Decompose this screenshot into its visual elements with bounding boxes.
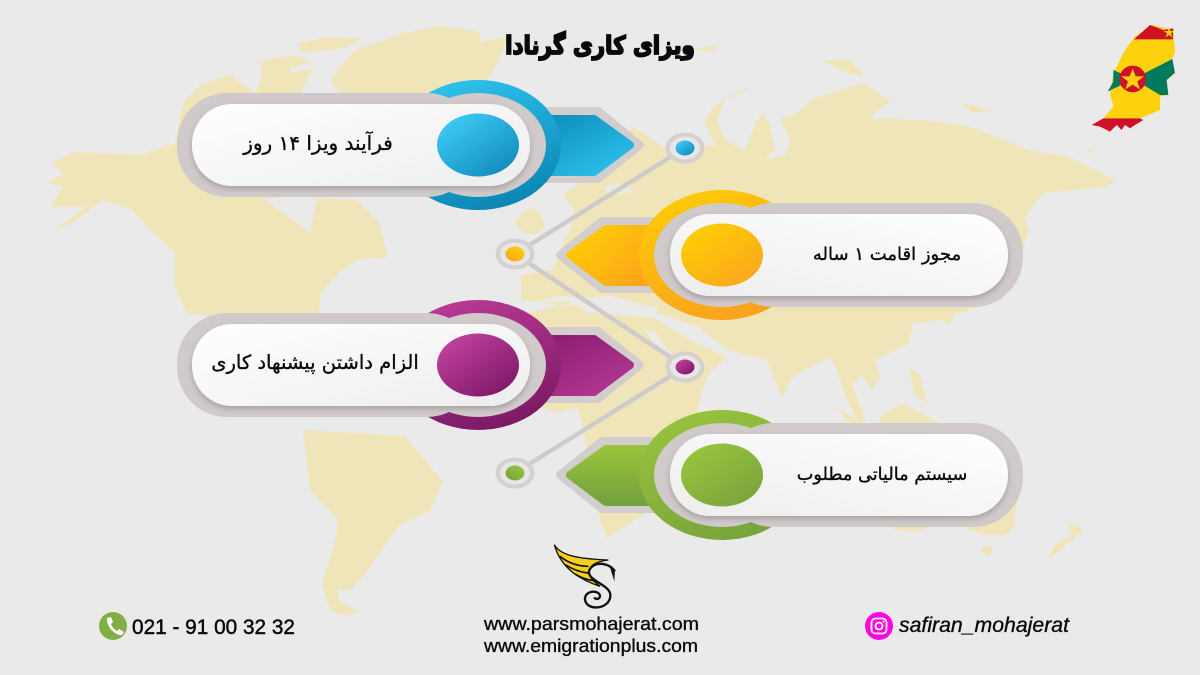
icon: phone — [99, 612, 127, 640]
logo — [554, 545, 615, 607]
phone contact — [99, 612, 295, 640]
node 2 — [496, 238, 534, 270]
instagram handle: safiran_mohajerat — [899, 614, 1070, 637]
card text: job offer: الزام داشتن پیشنهاد کاری — [211, 351, 419, 374]
instagram contact — [865, 612, 1070, 640]
website links: www.emigrationplus.com — [483, 635, 698, 656]
card text: tax system: سیستم مالیاتی مطلوب — [797, 465, 967, 485]
card text: visa process: فرآیند ویزا ۱۴ روز — [242, 130, 393, 155]
node 1 — [666, 132, 704, 164]
phone number: 021 - 91 00 32 32 — [132, 615, 295, 639]
website links — [483, 613, 699, 656]
title: ویزای کاری گرنادا — [505, 30, 695, 60]
card: yellow residence permit — [560, 190, 1023, 320]
node 4 — [496, 458, 534, 488]
card: purple job offer — [177, 300, 640, 430]
website links: www.parsmohajerat.com — [483, 613, 699, 634]
connector lines — [515, 148, 685, 473]
card: green tax system — [560, 410, 1023, 540]
icon: instagram — [865, 612, 893, 640]
node 3 — [666, 352, 704, 382]
icon: Grenada flag map — [1092, 25, 1175, 132]
world map — [48, 26, 1116, 616]
card text: residence permit: مجوز اقامت ۱ ساله — [813, 244, 961, 265]
card: blue visa process — [177, 80, 640, 210]
